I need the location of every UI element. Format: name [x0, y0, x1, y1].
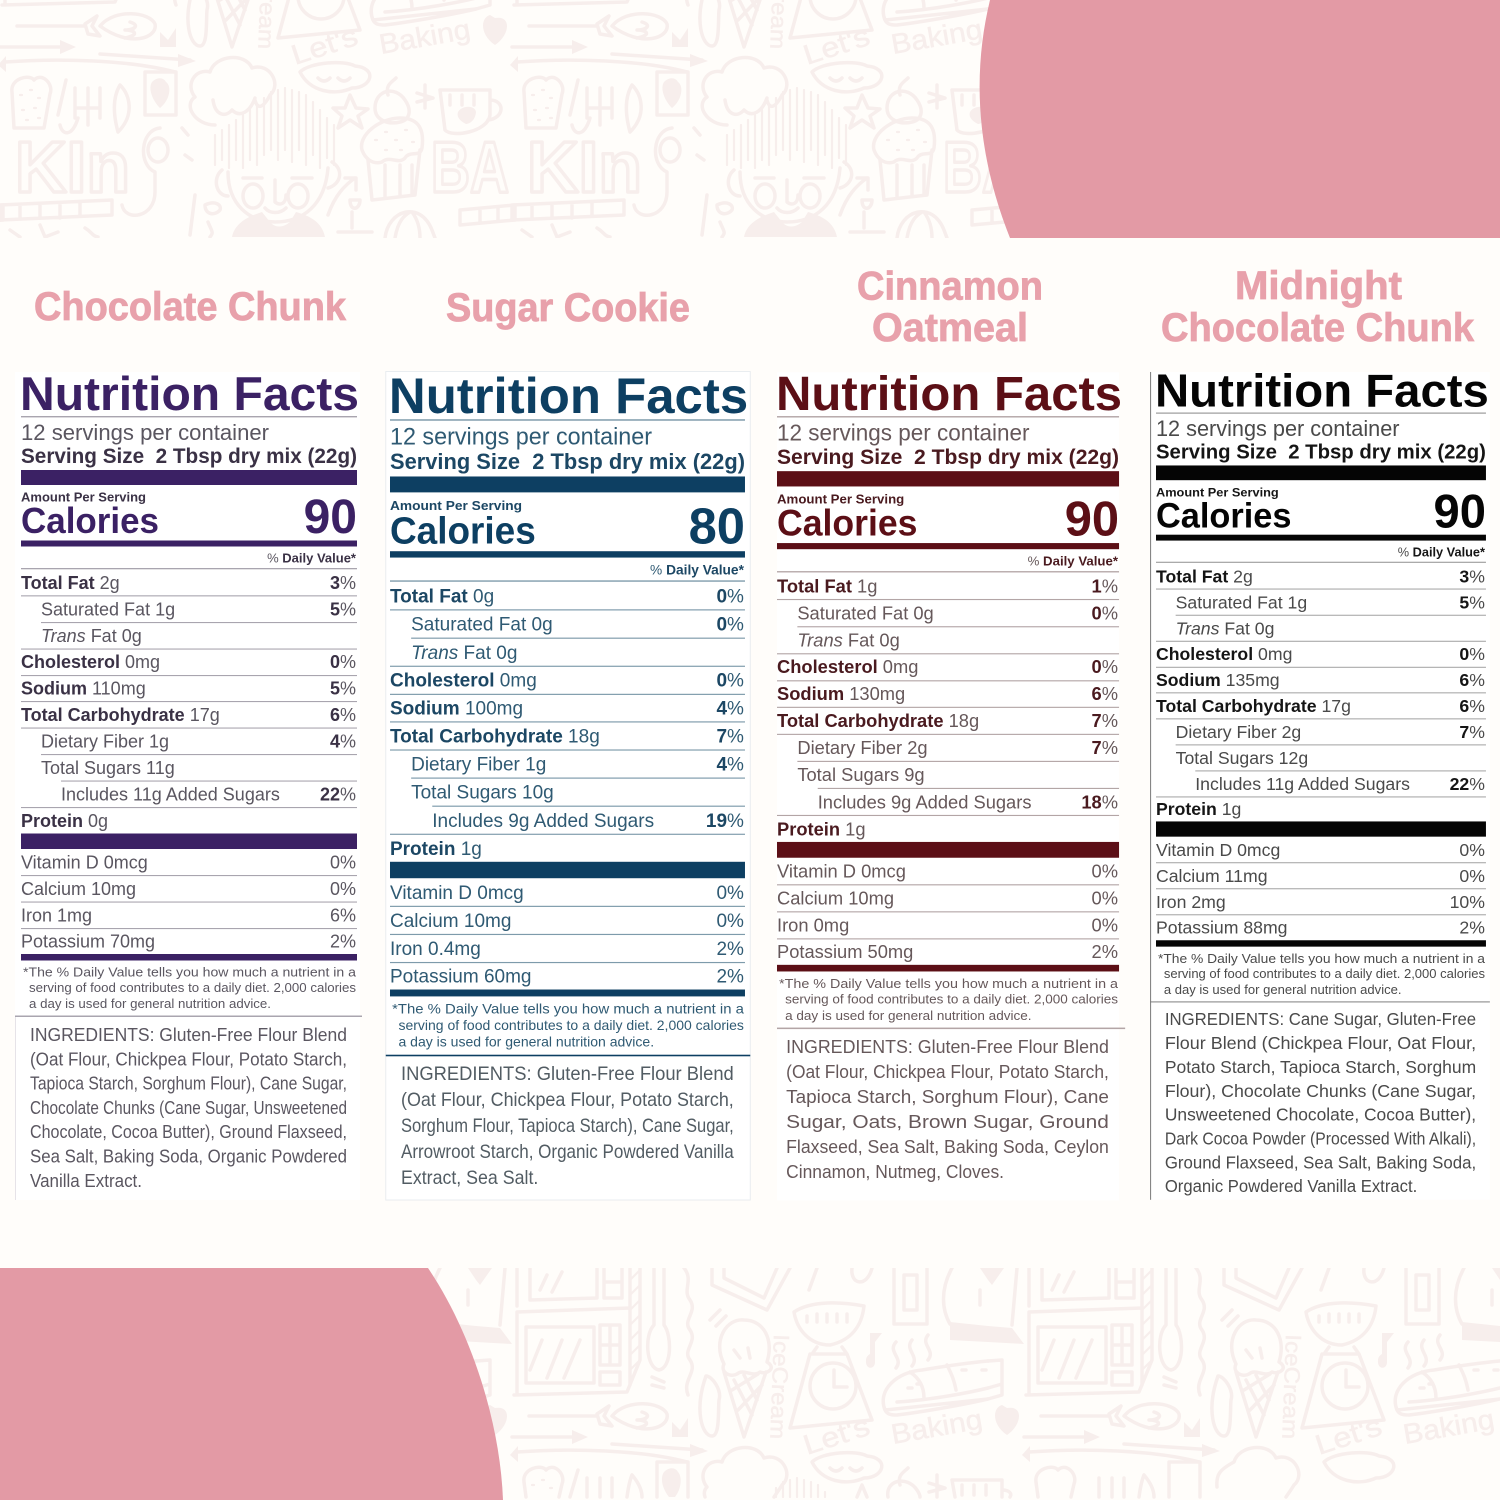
calories: Amount Per Serving [777, 491, 904, 506]
nutrient rows: Total Fat 1g [777, 576, 877, 597]
doodle pattern band: top: BA [431, 128, 509, 208]
ingredients: Potato Starch, Tapioca Starch, Sorghum [1165, 1057, 1476, 1077]
ingredients [1165, 1009, 1476, 1196]
nutrient rows: Dietary Fiber 2g [797, 737, 928, 758]
servings: 12 servings per container [1156, 416, 1400, 441]
nutrient rows: 3% [1459, 566, 1485, 586]
title: Nutrition Facts [1155, 365, 1489, 417]
nutrient rows: 2% [716, 967, 744, 988]
ingredients: Organic Powdered Vanilla Extract. [1165, 1176, 1417, 1196]
nutrient rows: 7% [1092, 710, 1118, 731]
panel: Chocolate Chunk nutrition facts: Calories [21, 500, 159, 541]
ingredients: Sea Salt, Baking Soda, Organic Powdered [30, 1146, 347, 1166]
nutrient rows: Protein 0g [21, 811, 108, 831]
nutrient rows: Cholesterol 0mg [21, 652, 160, 672]
nutrient rows: 0% [716, 911, 744, 932]
nutrient rows: 0% [1092, 656, 1118, 677]
nutrient rows: Calcium 10mg [390, 911, 511, 932]
nutrient rows: 0% [1092, 888, 1118, 909]
doodle pattern band: bottom: Let's [1311, 1410, 1386, 1461]
nutrient rows: 19% [706, 811, 744, 832]
nutrient rows: Sodium 110mg [21, 678, 146, 698]
calories: Amount Per Serving [390, 498, 522, 513]
nutrient rows: Saturated Fat 1g [41, 600, 175, 620]
nutrient rows: Potassium 70mg [21, 932, 155, 952]
footnote: *The % Daily Value tells you how much a nutrient in a [779, 976, 1119, 991]
heading: Cinnamon Oatmeal: Cinnamon [857, 264, 1043, 308]
nutrient rows: 0% [330, 879, 356, 899]
nutrient rows: 10% [1450, 892, 1485, 912]
heading: Midnight Chocolate Chunk [1161, 264, 1475, 350]
nutrient rows: 2% [1459, 917, 1485, 937]
nutrient rows: 5% [330, 678, 356, 698]
nutrient rows: Vitamin D 0mcg [777, 861, 906, 882]
footnote: a day is used for general nutrition advice. [1164, 982, 1402, 997]
title: Nutrition Facts [20, 367, 359, 420]
nutrient rows: Trans Fat 0g [41, 626, 142, 646]
nutrient rows: Saturated Fat 1g [1176, 592, 1307, 612]
footnote: *The % Daily Value tells you how much a nutrient in a [23, 964, 357, 980]
nutrient rows: Total Carbohydrate 18g [777, 710, 979, 731]
nutrient rows: Total Fat 2g [1156, 566, 1253, 586]
panel: Cinnamon Oatmeal nutrition facts: 90 [1065, 492, 1119, 546]
nutrient rows: Sodium 100mg [390, 698, 523, 719]
nutrient rows: Cholesterol 0mg [1156, 644, 1292, 664]
nutrient rows: 6% [1459, 670, 1485, 690]
nutrient rows: Includes 9g Added Sugars [432, 811, 654, 832]
ingredients [401, 1064, 734, 1189]
ingredients: Cinnamon, Nutmeg, Cloves. [786, 1161, 1004, 1182]
doodle pattern band: top: Let's [799, 20, 874, 71]
doodle pattern band: top: Baking [889, 13, 985, 60]
nutrient rows: Sodium 135mg [1156, 670, 1280, 690]
ingredients [786, 1036, 1109, 1182]
footnote: serving of food contributes to a daily diet. 2,000 calories [1164, 966, 1485, 981]
nutrient rows: Calcium 11mg [1156, 866, 1268, 886]
ingredients: Chocolate Chunks (Cane Sugar, Unsweetened [30, 1098, 347, 1118]
label background [386, 372, 750, 1200]
nutrient rows: Vitamin D 0mcg [1156, 840, 1280, 860]
calories: Amount Per Serving [1156, 485, 1279, 499]
ingredients [30, 1025, 347, 1191]
doodle pattern band: bottom: Baking [1401, 1403, 1497, 1450]
ingredients: Vanilla Extract. [30, 1171, 142, 1191]
nutrient rows: 1% [1092, 576, 1118, 597]
nutrient rows: 0% [1092, 603, 1118, 624]
doodle pattern band: top: KIn [15, 128, 130, 208]
nutrient rows: Total Sugars 11g [41, 758, 175, 778]
ingredients: Tapioca Starch, Sorghum Flour), Cane Sugar, [30, 1074, 347, 1094]
footnote [23, 964, 357, 1011]
nutrient rows: 6% [330, 906, 356, 926]
nutrient rows: Iron 1mg [21, 906, 92, 926]
doodle pattern band: bottom: IceCream [765, 1334, 794, 1440]
nutrient rows: Sodium 130mg [777, 683, 905, 704]
panel: Chocolate Chunk nutrition facts: Serving Size 2 Tbsp dry mix (22g) [21, 445, 357, 468]
ingredients: Extract, Sea Salt. [401, 1168, 538, 1189]
nutrient rows: Protein 1g [390, 839, 482, 860]
nutrient rows: 7% [716, 727, 744, 748]
ingredients: Arrowroot Starch, Organic Powdered Vanilla [401, 1142, 734, 1163]
footnote [392, 1001, 744, 1050]
nutrient rows: Protein 1g [1156, 799, 1241, 819]
nutrient rows: 2% [716, 939, 744, 960]
nutrient rows: Total Carbohydrate 18g [390, 727, 600, 748]
nutrient rows: Iron 0mg [777, 915, 849, 936]
nutrient rows [1156, 566, 1486, 937]
nutrient rows [390, 587, 745, 988]
nutrient rows: 6% [1092, 683, 1118, 704]
nutrient rows: 4% [716, 698, 744, 719]
nutrient rows: Cholesterol 0mg [777, 656, 918, 677]
ingredients: Unsweetened Chocolate, Cocoa Butter), [1165, 1105, 1476, 1125]
nutrient rows: Total Sugars 10g [411, 783, 554, 804]
footnote: serving of food contributes to a daily diet. 2,000 calories [785, 992, 1118, 1007]
doodle pattern band: top: Baking [377, 13, 473, 60]
nutrient rows [21, 573, 357, 952]
pink blob: bottom left [0, 1268, 503, 1500]
ingredients: Flour), Chocolate Chunks (Cane Sugar, [1165, 1081, 1476, 1101]
doodle pattern band: top: KIn [527, 128, 642, 208]
nutrient rows: Total Sugars 12g [1176, 748, 1308, 768]
ingredients: Chocolate, Cocoa Butter), Ground Flaxseed, [30, 1122, 347, 1142]
ingredients: Flour Blend (Chickpea Flour, Oat Flour, [1165, 1033, 1476, 1053]
nutrient rows: Protein 1g [777, 818, 866, 839]
nutrient rows: 22% [320, 784, 356, 804]
nutrient rows: 6% [330, 705, 356, 725]
panel: Chocolate Chunk nutrition facts: % Daily Value* [267, 550, 357, 566]
nutrient rows: 5% [330, 600, 356, 620]
footnote: *The % Daily Value tells you how much a nutrient in a [392, 1001, 744, 1016]
nutrient rows: Trans Fat 0g [411, 643, 517, 664]
pink blob: top right [980, 0, 1500, 238]
nutrient rows: 0% [330, 652, 356, 672]
servings: 12 servings per container [21, 420, 269, 445]
ingredients: INGREDIENTS: Cane Sugar, Gluten-Free [1165, 1009, 1476, 1029]
nutrient rows: 0% [1092, 915, 1118, 936]
heading: Midnight Chocolate Chunk: Chocolate Chunk [1161, 306, 1475, 350]
nutrient rows: Vitamin D 0mcg [21, 852, 148, 872]
ingredients: Ground Flaxseed, Sea Salt, Baking Soda, [1165, 1152, 1476, 1172]
nutrient rows: Total Sugars 9g [797, 764, 925, 785]
nutrient rows: Potassium 60mg [390, 967, 532, 988]
nutrient rows: 0% [1092, 861, 1118, 882]
title: Nutrition Facts [389, 368, 748, 424]
nutrient rows: 18% [1081, 791, 1118, 812]
nutrient rows: 0% [1459, 840, 1485, 860]
nutrient rows: Potassium 88mg [1156, 917, 1288, 937]
nutrient rows: 5% [1459, 592, 1485, 612]
nutrient rows: 0% [716, 615, 744, 636]
ingredients: Tapioca Starch, Sorghum Flour), Cane [786, 1086, 1109, 1107]
ingredients: INGREDIENTS: Gluten-Free Flour Blend [401, 1064, 734, 1085]
nutrient rows: Trans Fat 0g [797, 630, 900, 651]
ingredients: (Oat Flour, Chickpea Flour, Potato Starch, [786, 1061, 1109, 1082]
doodle pattern band: top [0, 0, 1027, 238]
ingredients: INGREDIENTS: Gluten-Free Flour Blend [786, 1036, 1109, 1057]
panel: Midnight Chocolate Chunk nutrition facts [1150, 365, 1490, 1200]
nutrient rows: 4% [330, 732, 356, 752]
nutrient rows: 0% [1459, 644, 1485, 664]
heading: Cinnamon Oatmeal: Oatmeal [872, 306, 1028, 350]
footnote: a day is used for general nutrition advice. [29, 996, 271, 1011]
calories: Amount Per Serving [21, 490, 146, 504]
nutrient rows: Total Carbohydrate 17g [1156, 696, 1351, 716]
nutrient rows: Calcium 10mg [777, 888, 894, 909]
nutrient rows [777, 576, 1119, 962]
nutrient rows: 22% [1450, 774, 1485, 794]
nutrient rows: Includes 9g Added Sugars [818, 791, 1032, 812]
panel: Cinnamon Oatmeal nutrition facts [776, 368, 1125, 1200]
panel: Sugar Cookie nutrition facts: 80 [689, 497, 745, 554]
footnote [779, 976, 1119, 1023]
nutrient rows: Cholesterol 0mg [390, 670, 537, 691]
nutrient rows: Saturated Fat 0g [411, 615, 553, 636]
doodle pattern band: bottom: Baking [889, 1403, 985, 1450]
nutrient rows: Total Fat 0g [390, 587, 494, 608]
nutrient rows: 0% [716, 587, 744, 608]
panel: Sugar Cookie nutrition facts [386, 368, 750, 1200]
ingredients: Sorghum Flour, Tapioca Starch), Cane Sugar, [401, 1116, 734, 1137]
heading: Midnight Chocolate Chunk: Midnight [1235, 264, 1402, 308]
panel: Midnight Chocolate Chunk nutrition facts: Calories [1156, 496, 1292, 535]
nutrient rows: 0% [330, 852, 356, 872]
nutrient rows: 0% [716, 670, 744, 691]
nutrient rows: 3% [330, 573, 356, 593]
panel: Chocolate Chunk nutrition facts: 90 [304, 491, 357, 544]
doodle pattern band: bottom: Let's [799, 1410, 874, 1461]
nutrient rows: Includes 11g Added Sugars [1195, 774, 1410, 794]
nutrient rows: Trans Fat 0g [1176, 618, 1274, 638]
label background [777, 372, 1119, 1200]
nutrient rows: Calcium 10mg [21, 879, 136, 899]
footnote: serving of food contributes to a daily diet. 2,000 calories [398, 1018, 744, 1033]
panel: Midnight Chocolate Chunk nutrition facts: Serving Size 2 Tbsp dry mix (22g) [1156, 441, 1486, 464]
nutrient rows: 6% [1459, 696, 1485, 716]
nutrient rows: Includes 11g Added Sugars [61, 784, 280, 804]
nutrient rows: 2% [1092, 941, 1118, 962]
nutrient rows: Dietary Fiber 1g [411, 755, 546, 776]
footnote: *The % Daily Value tells you how much a nutrient in a [1158, 951, 1486, 966]
label background [1150, 372, 1490, 1200]
heading: Sugar Cookie: Sugar Cookie [446, 286, 690, 330]
servings: 12 servings per container [390, 424, 652, 451]
ingredients: Sugar, Oats, Brown Sugar, Ground [786, 1111, 1109, 1132]
panel: Sugar Cookie nutrition facts: % Daily Value* [650, 563, 745, 578]
nutrient rows: 7% [1092, 737, 1118, 758]
ingredients: INGREDIENTS: Gluten-Free Flour Blend [30, 1025, 347, 1045]
nutrient rows: Total Fat 2g [21, 573, 120, 593]
servings: 12 servings per container [777, 420, 1030, 446]
footnote: a day is used for general nutrition advice. [785, 1008, 1031, 1023]
title: Nutrition Facts [776, 368, 1122, 421]
ingredients: (Oat Flour, Chickpea Flour, Potato Starch, [30, 1049, 347, 1069]
ingredients: (Oat Flour, Chickpea Flour, Potato Starch, [401, 1090, 734, 1111]
nutrient rows: 0% [1459, 866, 1485, 886]
nutrient rows: 4% [716, 755, 744, 776]
footnote: a day is used for general nutrition advice. [398, 1035, 654, 1050]
footnote [1158, 951, 1486, 997]
panel: Cinnamon Oatmeal nutrition facts: Serving Size 2 Tbsp dry mix (22g) [777, 445, 1119, 469]
nutrient rows: Iron 0.4mg [390, 939, 481, 960]
panel: Cinnamon Oatmeal nutrition facts: % Daily Value* [1028, 553, 1119, 569]
nutrient rows: Dietary Fiber 2g [1176, 722, 1301, 742]
doodle pattern band: top: BA [943, 128, 1021, 208]
panel: Sugar Cookie nutrition facts: Calories [390, 510, 536, 552]
panel: Chocolate Chunk nutrition facts [15, 367, 362, 1200]
nutrient rows: Saturated Fat 0g [797, 603, 934, 624]
heading: Cinnamon Oatmeal [857, 264, 1043, 350]
nutrient rows: Iron 2mg [1156, 892, 1226, 912]
heading: Chocolate Chunk: Chocolate Chunk [34, 285, 347, 329]
panel: Sugar Cookie nutrition facts: Serving Size 2 Tbsp dry mix (22g) [390, 449, 745, 474]
ingredients: Flaxseed, Sea Salt, Baking Soda, Ceylon [786, 1136, 1109, 1157]
panel: Midnight Chocolate Chunk nutrition facts: 90 [1434, 484, 1486, 537]
nutrient rows: Total Carbohydrate 17g [21, 705, 220, 725]
panel: Cinnamon Oatmeal nutrition facts: Calories [777, 502, 917, 543]
nutrient rows: Dietary Fiber 1g [41, 732, 169, 752]
label background [15, 372, 360, 1200]
panel: Midnight Chocolate Chunk nutrition facts: % Daily Value* [1398, 544, 1485, 559]
doodle pattern band: top: Let's [287, 20, 362, 71]
doodle pattern band: bottom: IceCream [1277, 1334, 1306, 1440]
nutrient rows: 2% [330, 932, 356, 952]
footnote: serving of food contributes to a daily diet. 2,000 calories [29, 980, 357, 995]
nutrient rows: 0% [716, 883, 744, 904]
nutrient rows: Potassium 50mg [777, 941, 913, 962]
nutrient rows: 7% [1459, 722, 1485, 742]
doodle pattern band: bottom [434, 1268, 1500, 1499]
nutrient rows: Vitamin D 0mcg [390, 883, 524, 904]
